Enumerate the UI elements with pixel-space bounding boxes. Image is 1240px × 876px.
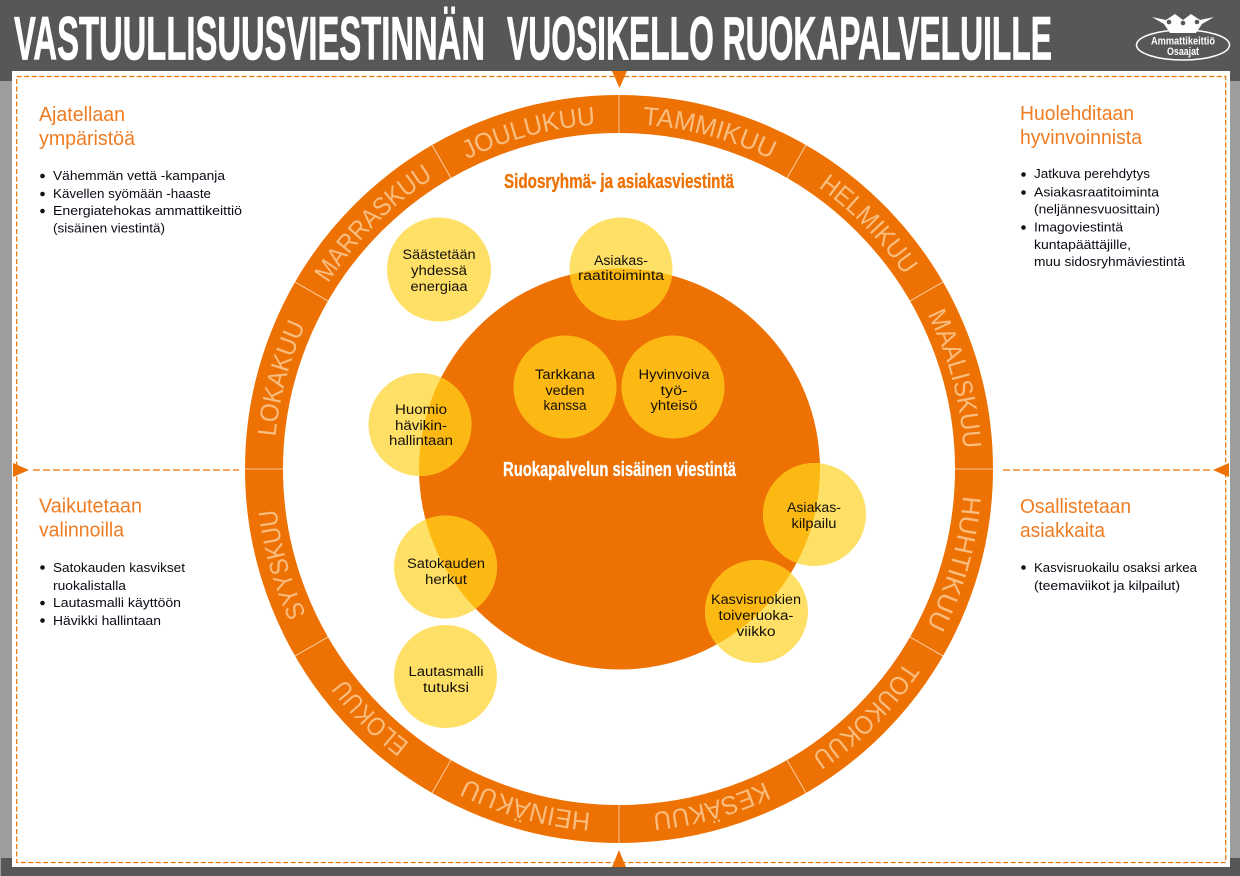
bubble: Kasvisruokien toiveruokaviikko: Kasvisruokien bbox=[711, 592, 801, 607]
month ring: SYYSKUU bbox=[258, 512, 304, 619]
panel: Osallistetaan asiakkaita: Osallistetaan bbox=[1020, 496, 1131, 518]
arrow: top bbox=[612, 71, 627, 88]
panel: Vaikutetaan valinnoilla: Hävikki hallintaan bbox=[53, 613, 161, 628]
panel: Huolehditaan hyvinvoinnista: muu sidosryhmäviestintä bbox=[1034, 254, 1186, 269]
month ring: MAALISKUU bbox=[928, 308, 982, 446]
panel: Ajatellaan ympäristöä: (sisäinen viestintä) bbox=[53, 220, 165, 236]
bubble: Hyvinvoiva työyhteisö bbox=[622, 336, 724, 438]
month ring: TAMMIKUU bbox=[644, 107, 777, 156]
bubble: Satokauden herkut bbox=[394, 516, 497, 618]
panel: Osallistetaan asiakkaita: Kasvisruokailu osaksi arkea bbox=[1034, 560, 1198, 575]
panel: Huolehditaan hyvinvoinnista bbox=[1020, 103, 1186, 269]
bubble: Asiakasraatitoiminta bbox=[570, 218, 672, 320]
bubble: Hyvinvoiva työyhteisö: työ- bbox=[660, 383, 688, 398]
bubble: Tarkkana veden kanssa: veden bbox=[546, 383, 584, 398]
panel: Vaikutetaan valinnoilla bbox=[39, 496, 185, 628]
bubble: Kasvisruokien toiveruokaviikko bbox=[705, 560, 808, 663]
bubble: Hyvinvoiva työyhteisö: Hyvinvoiva bbox=[638, 367, 710, 382]
panel: Osallistetaan asiakkaita bbox=[1020, 496, 1198, 593]
bubble: Huomio hävikinhallintaan: hävikin- bbox=[395, 418, 447, 433]
panel: Osallistetaan asiakkaita: (teemaviikot ja kilpailut) bbox=[1034, 578, 1180, 593]
bubble: Säästetään yhdessä energiaa: energiaa bbox=[410, 279, 468, 294]
panel: Ajatellaan ympäristöä: Kävellen syömään -haaste bbox=[53, 186, 211, 201]
panel: Vaikutetaan valinnoilla: ruokalistalla bbox=[53, 578, 127, 593]
panel: Huolehditaan hyvinvoinnista: Asiakasraatitoiminta bbox=[1034, 184, 1160, 200]
bubble: Tarkkana veden kanssa: Tarkkana bbox=[535, 367, 596, 382]
bubble: Säästetään yhdessä energiaa: yhdessä bbox=[411, 263, 468, 278]
month ring: JOULUKUU bbox=[464, 107, 594, 158]
panel: Ajatellaan ympäristöä: ympäristöä bbox=[39, 128, 136, 150]
logo: Ammattikeittiö Osaajat: Ammattikeittiö bbox=[1151, 36, 1215, 48]
bubble: Säästetään yhdessä energiaa bbox=[387, 218, 491, 322]
bubble: Asiakasraatitoiminta: Asiakas- bbox=[594, 253, 648, 268]
bubble: Satokauden herkut: herkut bbox=[425, 572, 467, 587]
bubble: Satokauden herkut: Satokauden bbox=[407, 556, 485, 571]
month ring: MARRASKUU bbox=[314, 164, 430, 282]
bubble: Tarkkana veden kanssa: kanssa bbox=[544, 398, 587, 413]
month ring: LOKAKUU bbox=[258, 320, 303, 435]
panel: Osallistetaan asiakkaita: asiakkaita bbox=[1020, 520, 1106, 542]
heading: stakeholder communication: Sidosryhmä- ja asiakasviestintä bbox=[504, 171, 735, 193]
panel: Huolehditaan hyvinvoinnista: (neljännesvuosittain) bbox=[1034, 202, 1160, 216]
bubble: Säästetään yhdessä energiaa: Säästetään bbox=[402, 247, 476, 262]
bubble: Kasvisruokien toiveruokaviikko: viikko bbox=[736, 624, 776, 639]
arrow: right bbox=[1213, 463, 1229, 477]
bubble: Asiakaskilpailu: Asiakas- bbox=[787, 500, 841, 515]
panel: Huolehditaan hyvinvoinnista: Jatkuva perehdytys bbox=[1034, 166, 1151, 181]
month ring: HEINÄKUU bbox=[460, 781, 589, 830]
panel: Ajatellaan ympäristöä: Energiatehokas ammattikeittiö bbox=[53, 203, 242, 218]
panel: Ajatellaan ympäristöä: Ajatellaan bbox=[39, 104, 125, 126]
month ring: TOUKOKUU bbox=[815, 666, 920, 769]
month ring bbox=[245, 95, 993, 843]
bubble: Asiakaskilpailu: kilpailu bbox=[792, 516, 836, 531]
bubble: Huomio hävikinhallintaan bbox=[368, 373, 472, 476]
heading: internal communication: Ruokapalvelun sisäinen viestintä bbox=[503, 459, 737, 481]
panel: Vaikutetaan valinnoilla: Lautasmalli käyttöön bbox=[53, 595, 181, 610]
bubble: Tarkkana veden kanssa bbox=[514, 336, 616, 438]
arrow: left bbox=[13, 463, 29, 477]
panel: Huolehditaan hyvinvoinnista: Imagoviestintä bbox=[1034, 220, 1124, 234]
panel: Vaikutetaan valinnoilla: Vaikutetaan bbox=[39, 496, 142, 518]
month ring: KESÄKUU bbox=[655, 782, 770, 830]
panel: Huolehditaan hyvinvoinnista: hyvinvoinnista bbox=[1020, 127, 1143, 149]
arrow: bottom bbox=[612, 850, 626, 867]
panel: Huolehditaan hyvinvoinnista: kuntapäättäjille, bbox=[1034, 237, 1131, 252]
panel: Vaikutetaan valinnoilla: Satokauden kasvikset bbox=[53, 560, 185, 575]
internal communication circle bbox=[419, 268, 820, 670]
bubble: Huomio hävikinhallintaan: Huomio bbox=[395, 402, 447, 417]
bubble: Lautasmalli tutuksi bbox=[394, 625, 497, 728]
title: VASTUULLISUUSVIESTINNÄN bbox=[14, 4, 485, 72]
logo: Ammattikeittiö Osaajat: Osaajat bbox=[1167, 46, 1199, 58]
panel: Vaikutetaan valinnoilla: valinnoilla bbox=[39, 520, 125, 542]
bubble: Lautasmalli tutuksi: tutuksi bbox=[423, 680, 469, 695]
panel: Huolehditaan hyvinvoinnista: Huolehditaan bbox=[1020, 103, 1134, 125]
bubble: Hyvinvoiva työyhteisö: yhteisö bbox=[650, 398, 698, 413]
month ring: ELOKUU bbox=[332, 682, 408, 756]
panel: Ajatellaan ympäristöä bbox=[39, 104, 242, 236]
panel: Ajatellaan ympäristöä: Vähemmän vettä -kampanja bbox=[53, 168, 226, 183]
logo: Ammattikeittiö Osaajat bbox=[1136, 14, 1230, 60]
bubble: Asiakaskilpailu bbox=[763, 463, 866, 566]
bubble: Kasvisruokien toiveruokaviikko: toiveruoka- bbox=[718, 608, 794, 623]
bubble: Asiakasraatitoiminta: raatitoiminta bbox=[578, 268, 665, 283]
bubble: Huomio hävikinhallintaan: hallintaan bbox=[389, 433, 453, 448]
bubble: Lautasmalli tutuksi: Lautasmalli bbox=[408, 664, 484, 679]
month ring: HUHTIKUU bbox=[929, 498, 981, 632]
month ring: HELMIKUU bbox=[820, 174, 918, 272]
